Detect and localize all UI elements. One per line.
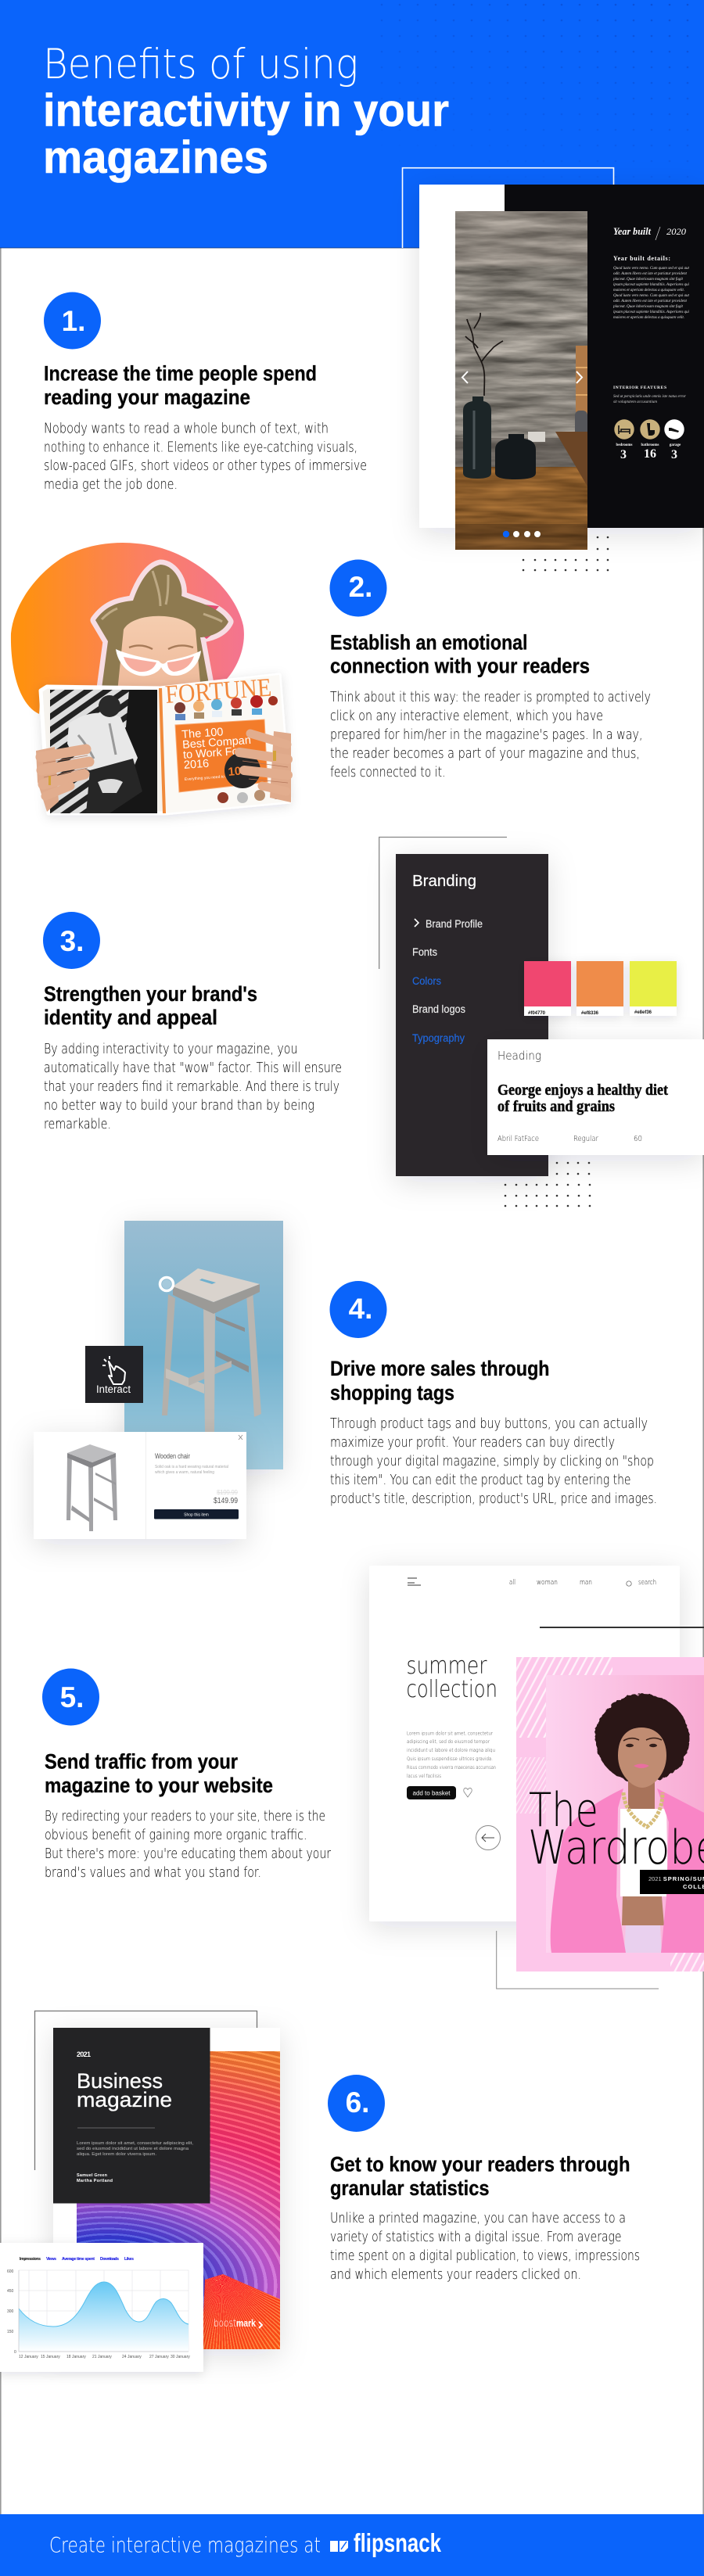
body 2: prepared for him/her in the magazine's pages. In a way, <box>330 727 643 743</box>
heading 3 <box>44 982 257 1029</box>
heading 6: Get to know your readers through <box>330 2152 630 2176</box>
hair and face <box>95 565 228 692</box>
property text: placeat. Quae laboriosam magnam sint fugit <box>612 276 684 282</box>
heading 1 <box>44 361 317 409</box>
arrow button <box>476 1825 501 1850</box>
property text: odit. Autem libero est iste et pariatur provident <box>613 271 688 276</box>
section 5 text <box>42 1669 332 1881</box>
heading 1: reading your magazine <box>44 386 250 409</box>
body 5: By redirecting your readers to your site, there is the <box>45 1809 325 1824</box>
blob <box>11 543 244 714</box>
open magazine: to Work For <box>183 745 242 762</box>
cover title: The <box>529 1783 598 1838</box>
feature icons: bedrooms <box>616 443 633 447</box>
panel: branding sidebar: Brand Profile <box>426 918 483 930</box>
body 6: Unlike a printed magazine, you can have access to a <box>330 2211 626 2226</box>
number badge 4 <box>330 1281 386 1338</box>
chart axis labels: 0 <box>14 2350 16 2355</box>
decorative frame section 6 <box>34 2011 257 2170</box>
open magazine <box>41 674 289 813</box>
chart axis labels: 30 January <box>171 2355 190 2359</box>
property text: INTERIOR FEATURES <box>613 386 666 390</box>
feature icons: bathrooms <box>641 443 659 447</box>
panel: branding sidebar: Fonts <box>412 946 437 958</box>
number badge 4: 4. <box>349 1293 372 1325</box>
body 2: the reader becomes a part of your magazine and thus, <box>330 746 640 762</box>
body 4 <box>330 1416 657 1507</box>
body 5: brand's values and what you stand for. <box>45 1865 261 1881</box>
icon: heart <box>464 1788 472 1797</box>
product card: $149.99 <box>214 1497 238 1505</box>
body 5: But there's more: you're educating them about your <box>45 1846 332 1862</box>
section 1 text <box>44 292 367 493</box>
collection description: Risus commodo viverra maecenas accumsan <box>407 1764 496 1771</box>
feature icons <box>614 419 684 461</box>
chart legend: Downloads <box>100 2257 119 2262</box>
panel: branding sidebar: Branding <box>412 873 476 890</box>
collection description: Lorem ipsum dolor sit amet, consectetur <box>407 1730 493 1736</box>
flipsnack logo: flipsnack <box>354 2528 441 2557</box>
body 1: Nobody wants to read a whole bunch of text, with <box>44 421 329 436</box>
icon: tap hand <box>102 1356 125 1384</box>
panel: branding sidebar: Colors <box>412 975 441 987</box>
collection description: Quis ipsum suspendisse ultrices gravida. <box>407 1756 493 1762</box>
dark cover block: sed do eiusmod incididunt ut labore et dolore magna <box>77 2147 189 2151</box>
panel: business magazine <box>53 2028 280 2349</box>
chart axis labels: 150 <box>7 2330 14 2334</box>
property text: Year built details: <box>613 255 670 262</box>
site navigation <box>408 1578 656 1587</box>
heading 2: Establish an emotional <box>330 630 527 654</box>
number badge 5: 5. <box>60 1681 84 1713</box>
collection description: lacus vel facilisis <box>407 1773 441 1779</box>
collection description: adipiscing elit, sed do eiusmod tempor <box>407 1738 490 1745</box>
heading 2 <box>330 630 590 677</box>
property text: 2020 <box>666 226 686 237</box>
body 2: feels connected to it. <box>330 765 446 780</box>
dark cover block: magazine <box>77 2088 172 2111</box>
title: Benefits of using <box>43 41 358 88</box>
site navigation: woman <box>537 1579 558 1587</box>
property text: maiores et aperiam delectus a quisquam velit. <box>613 288 684 292</box>
dark cover block: Lorem ipsum dolor sit amet, consectetur adipiscing elit, <box>77 2141 194 2146</box>
panel: branding sidebar: Brand logos <box>412 1003 465 1015</box>
footer band: Create interactive magazines at <box>49 2534 321 2557</box>
decorative frame section 3 <box>379 837 507 969</box>
body 1: slow-paced GIFs, short videos or other types of immersive <box>44 458 367 474</box>
cover label <box>640 1870 704 1894</box>
number badge 1: 1. <box>62 305 85 337</box>
chart area <box>19 2282 189 2352</box>
chart axis labels: 600 <box>7 2269 14 2274</box>
dots pattern <box>523 536 609 571</box>
open magazine: Best Compan <box>182 734 251 752</box>
site navigation: man <box>580 1579 592 1587</box>
title <box>43 41 449 183</box>
body 4: this item". You can edit the product tag by entering the <box>330 1473 630 1488</box>
section 6 text <box>328 2075 640 2283</box>
property text: ipsam placeat sapiente blanditiis. Asperiores qui <box>613 310 690 314</box>
collection title: summer <box>407 1652 487 1680</box>
collection title <box>407 1652 497 1703</box>
product card: Wooden chair <box>155 1452 190 1460</box>
body 3: remarkable. <box>44 1117 111 1132</box>
chart legend: Views <box>46 2257 56 2262</box>
brand mark: boostmark <box>214 2317 257 2330</box>
rings <box>48 751 276 785</box>
body 2: click on any interactive element, which you have <box>330 709 603 724</box>
property text: odit. Autem libero est iste et pariatur provident <box>613 299 688 303</box>
open magazine: 2016 <box>183 758 210 772</box>
site navigation: all <box>509 1579 515 1587</box>
feature icons: 3 <box>671 448 677 461</box>
chart axis labels: 12 January <box>19 2355 38 2359</box>
chart axis labels <box>7 2269 190 2359</box>
colour swatches: #e8ef36 <box>634 1010 652 1015</box>
hands <box>36 731 291 812</box>
heading 4: Drive more sales through <box>330 1357 549 1380</box>
hotspot ring <box>160 1278 174 1290</box>
dark cover block: Samuel Green <box>77 2173 108 2178</box>
panel: website mockup <box>369 1566 704 1921</box>
number badge 1 <box>44 292 101 349</box>
body 3: automatically have that "wow" factor. This will ensure <box>44 1060 342 1076</box>
open magazine: Everything you need to know <box>185 774 235 782</box>
section 2 text <box>330 560 651 780</box>
heading 5 <box>45 1750 273 1797</box>
dark cover block: Martha Portland <box>77 2179 113 2183</box>
product stool <box>66 1444 117 1531</box>
number badge 2 <box>330 560 386 616</box>
product card: which gives a warm, natural feeling <box>155 1470 214 1475</box>
typography card: 60 <box>634 1135 642 1143</box>
product card: Solid oak is a hard wearing natural material <box>155 1465 228 1469</box>
decorative frame section 5 <box>497 1931 659 1989</box>
slider arrows <box>462 371 582 383</box>
body 1 <box>44 421 367 493</box>
body 3: By adding interactivity to your magazine, you <box>44 1042 297 1057</box>
body 3: no better way to build your brand than by being <box>44 1098 314 1114</box>
number badge 6 <box>328 2075 385 2132</box>
heading 4 <box>330 1357 549 1405</box>
heading 1: Increase the time people spend <box>44 361 317 385</box>
spiral artwork <box>77 2051 280 2349</box>
body 3 <box>44 1042 342 1132</box>
panel: branding sidebar <box>396 854 548 1176</box>
body 1: nothing to enhance it. Elements like eye-catching visuals, <box>44 439 357 455</box>
cover title <box>530 1791 704 1864</box>
section 4 text <box>330 1281 657 1507</box>
colour swatches: #ef8336 <box>581 1011 599 1016</box>
section 3 text <box>43 912 342 1132</box>
chart legend: Average time spent <box>62 2257 95 2262</box>
body 4: Through product tags and buy buttons, you can actually <box>330 1416 648 1432</box>
typography card: of fruits and grains <box>497 1098 615 1115</box>
body 6: variety of statistics with a digital issue. From average <box>330 2230 621 2245</box>
dots pattern 3 <box>505 1162 591 1207</box>
number badge 6: 6. <box>346 2086 369 2119</box>
body 2 <box>330 690 651 780</box>
interact button: Interact <box>96 1383 131 1395</box>
body 5: obvious benefit of gaining more organic traffic. <box>45 1828 307 1843</box>
heading 3: Strengthen your brand's <box>44 982 257 1006</box>
footer band <box>0 2514 704 2576</box>
colour swatches <box>524 961 677 1016</box>
property text: Sed ut perspiciatis unde omnis iste natus error <box>613 394 687 399</box>
heading 4: shopping tags <box>330 1381 454 1405</box>
number badge 2: 2. <box>349 571 372 603</box>
product card: $199.99 <box>217 1489 239 1496</box>
chart axis labels: 27 January <box>149 2355 169 2359</box>
heading 6: granular statistics <box>330 2176 490 2200</box>
typography card: Heading <box>497 1049 541 1063</box>
title: interactivity in your <box>43 85 449 136</box>
body 3: that your readers find it remarkable. And there is truly <box>44 1079 339 1095</box>
heading 6 <box>330 2152 630 2200</box>
heading 5: magazine to your website <box>45 1774 273 1797</box>
magazine cover: the wardrobe <box>516 1657 704 1971</box>
chart axis labels: 450 <box>7 2289 14 2294</box>
product card: Shop this item <box>184 1512 209 1517</box>
property text: Quod iusto vero nemo. Cum quam sed et qui aut <box>613 266 690 271</box>
interact button <box>85 1346 143 1403</box>
woman <box>551 1694 704 1953</box>
chart axis labels: 300 <box>7 2309 14 2314</box>
panel: statistics chart <box>0 2243 203 2372</box>
property text <box>612 225 690 404</box>
chart axis labels: 18 January <box>66 2355 86 2359</box>
illustration: woman reading magazine <box>11 543 291 813</box>
number badge 5 <box>42 1669 99 1725</box>
body 6 <box>330 2211 640 2283</box>
add to basket button <box>407 1786 456 1799</box>
panel: branding sidebar: Typography <box>412 1032 465 1044</box>
body 4: maximize your profit. Your readers can buy directly <box>330 1435 615 1451</box>
body 1: media get the job done. <box>44 477 178 493</box>
number badge 3: 3. <box>60 925 84 957</box>
typography card <box>487 1039 704 1155</box>
open magazine: FORTUNE <box>164 674 272 709</box>
collection description <box>407 1730 496 1779</box>
dark cover block: Business <box>77 2069 163 2093</box>
property text: placeat. Quae laboriosam magnam sint fugit <box>612 303 684 309</box>
property text: Quod iusto vero nemo. Cum quam sed et qui aut <box>613 293 690 298</box>
product card <box>34 1432 246 1539</box>
header band <box>0 0 704 248</box>
body 5 <box>45 1809 332 1881</box>
heading 5: Send traffic from your <box>45 1750 238 1774</box>
chart grid <box>19 2270 189 2352</box>
property text: maiores et aperiam delectus a quisquam velit. <box>613 315 684 320</box>
property text: ipsam placeat sapiente blanditiis. Asperiores qui <box>613 282 690 287</box>
typography card: Abril FatFace <box>497 1135 539 1143</box>
dark cover block <box>53 2028 210 2204</box>
collection description: incididunt ut labore et dolore magna aliqu <box>407 1747 495 1753</box>
number badge 3 <box>43 912 100 969</box>
stool <box>162 1268 261 1432</box>
photo: blue stool <box>124 1221 283 1469</box>
decorative frame section 1 <box>402 168 613 248</box>
feature icons: garage <box>670 443 681 447</box>
dark cover block: aliqua. Eget lorem dolor viverra ipsum. <box>77 2152 156 2157</box>
heading 2: connection with your readers <box>330 654 590 677</box>
site navigation: search <box>638 1579 656 1587</box>
flipsnack logo <box>330 2528 441 2557</box>
title: magazines <box>43 132 268 183</box>
chart legend <box>20 2257 134 2262</box>
heading 3: identity and appeal <box>44 1006 217 1029</box>
property text: sit voluptatem accusantium <box>613 400 657 404</box>
room photo <box>455 211 587 550</box>
panel: website mockup: add to basket <box>413 1789 451 1797</box>
property text: Year built <box>613 225 651 237</box>
typography card: Regular <box>573 1135 599 1143</box>
feature icons: 3 <box>620 448 627 461</box>
chart axis labels: 15 January <box>41 2355 60 2359</box>
chart legend: Likes <box>124 2257 134 2262</box>
typography card: George enjoys a healthy diet <box>497 1082 668 1099</box>
collection title: collection <box>407 1676 497 1703</box>
chart legend: Impressions <box>20 2257 41 2262</box>
feature icons: 16 <box>644 447 656 461</box>
open magazine: 100 <box>228 764 248 779</box>
chart axis labels: 21 January <box>92 2355 112 2359</box>
colour swatches: #f04770 <box>528 1011 546 1016</box>
body 6: and which elements your readers clicked on. <box>330 2267 581 2283</box>
chart axis labels: 24 January <box>122 2355 142 2359</box>
open magazine: The 100 <box>181 726 224 741</box>
panel: property magazine spread <box>419 185 704 571</box>
dark cover block: 2021 <box>77 2050 91 2058</box>
slider dots <box>503 531 541 537</box>
